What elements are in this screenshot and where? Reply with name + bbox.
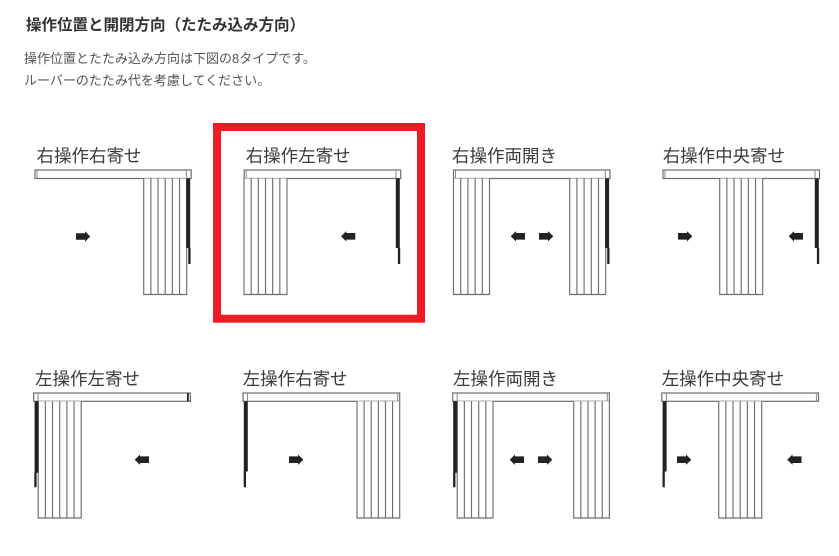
arrow left — [511, 231, 525, 242]
right louvers — [570, 178, 606, 294]
arrow right — [677, 454, 691, 465]
intro text: ルーバーのたたみ代を考慮してください。 — [24, 73, 270, 88]
head rail — [34, 393, 190, 401]
operating cord — [662, 401, 667, 487]
label: 左操作右寄せ — [243, 369, 348, 389]
louvers — [720, 178, 763, 294]
operating cord — [605, 178, 610, 264]
panel: right control, split — [452, 146, 610, 294]
label: 左操作左寄せ — [35, 369, 140, 389]
operating cord — [34, 401, 39, 487]
head rail — [663, 170, 820, 178]
operating cord — [396, 178, 400, 264]
operating cord — [815, 178, 819, 264]
arrow left — [789, 231, 803, 242]
louvers — [719, 401, 762, 518]
head rail — [662, 393, 818, 401]
louvers — [144, 178, 187, 294]
louvers — [357, 401, 400, 518]
panel: right control, stack center — [663, 146, 820, 294]
arrow left — [787, 454, 802, 465]
panel: right control, stack left — [244, 146, 401, 294]
arrow right — [678, 231, 692, 242]
head rail — [35, 170, 191, 178]
arrow right — [539, 231, 553, 242]
panel: left control, stack right — [243, 369, 400, 518]
arrow left — [341, 231, 355, 242]
intro text: 操作位置とたたみ込み方向は下図の8タイプです。 — [24, 51, 316, 66]
panel: left control, stack center — [662, 369, 818, 518]
head rail — [243, 393, 400, 401]
label: 右操作右寄せ — [36, 146, 142, 166]
panel: left control, stack left — [34, 369, 190, 518]
label: 右操作中央寄せ — [663, 146, 785, 166]
arrow left — [510, 454, 524, 465]
title: 操作位置と開閉方向（たたみ込み方向） — [26, 15, 305, 34]
left louvers — [454, 178, 490, 294]
panel: highlight frame — [217, 127, 421, 319]
left louvers — [457, 401, 493, 518]
arrow right — [76, 231, 90, 242]
label: 左操作両開き — [453, 369, 558, 389]
label: 右操作両開き — [452, 146, 557, 166]
panel: left control, split — [453, 369, 609, 518]
label: 左操作中央寄せ — [662, 369, 784, 389]
operating cord — [453, 401, 457, 487]
head rail — [244, 170, 401, 178]
label: 右操作左寄せ — [246, 146, 351, 166]
arrow right — [289, 454, 303, 465]
arrow right — [538, 454, 552, 465]
right louvers — [574, 401, 609, 518]
operating cord — [244, 401, 248, 487]
intro text — [24, 51, 316, 88]
panel: right control, stack right — [35, 146, 191, 294]
arrow left — [135, 454, 149, 465]
louvers — [38, 401, 81, 518]
louvers — [244, 178, 287, 294]
head rail — [454, 170, 610, 178]
head rail — [453, 393, 609, 401]
operating cord — [186, 178, 191, 264]
